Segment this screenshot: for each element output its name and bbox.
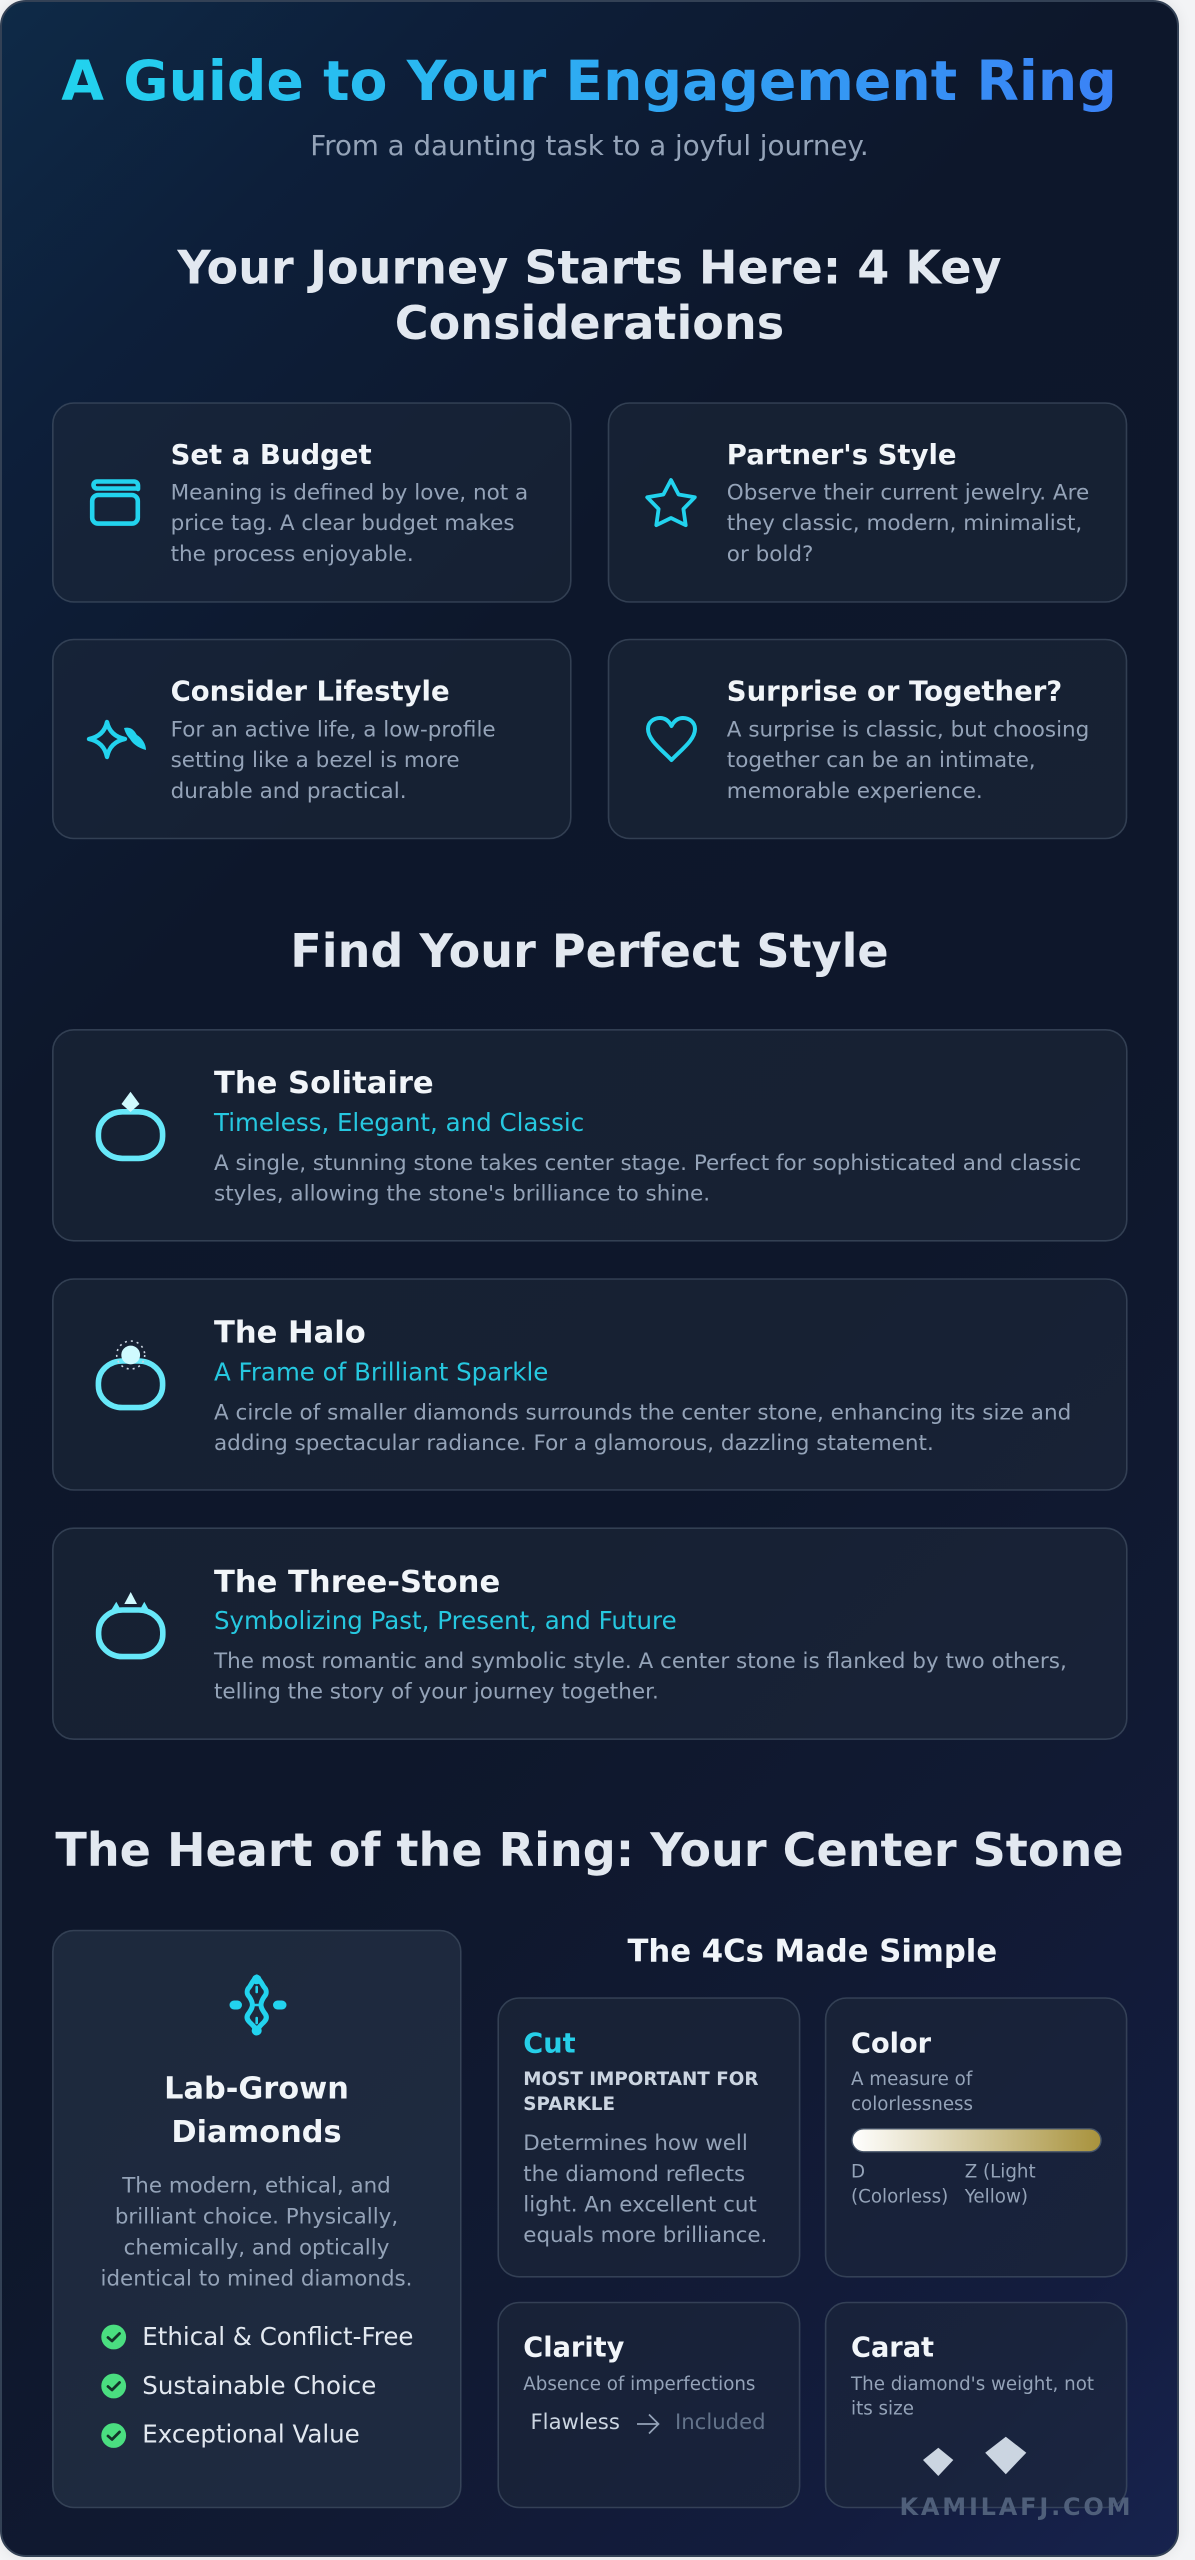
panel text: The modern, ethical, and	[121, 2174, 391, 2198]
card text: price tag. A clear budget makes	[171, 511, 515, 536]
style tagline: A Frame of Brilliant Sparkle	[214, 1357, 548, 1386]
card text: they classic, modern, minimalist,	[727, 511, 1082, 536]
panel heading: Lab-Grown	[164, 2072, 349, 2107]
list item: value: Exceptional Value	[142, 2420, 360, 2449]
card text: setting like a bezel is more	[171, 748, 460, 773]
panel: the three-stone	[53, 1528, 1127, 1739]
icon: star	[647, 480, 695, 525]
panel: consider lifestyle	[53, 640, 571, 838]
card text: A surprise is classic, but choosing	[727, 718, 1089, 742]
arrow	[637, 2414, 658, 2434]
style name: The Halo	[214, 1315, 366, 1350]
colour scale label: D: D	[851, 2162, 865, 2183]
colour scale bar	[852, 2129, 1101, 2152]
panel text: brilliant choice. Physically,	[115, 2204, 398, 2230]
icon: halo ring	[98, 1341, 163, 1408]
cut text: Determines how well	[523, 2131, 748, 2156]
panel: the halo	[53, 1279, 1127, 1490]
card heading: Surprise or Together?	[727, 676, 1062, 708]
cut text: the diamond reflects	[523, 2162, 745, 2187]
panel: surprise or together	[608, 640, 1126, 838]
cut heading: Cut	[523, 2029, 576, 2060]
watermark: KAMILAFJ.COM	[900, 2493, 1133, 2521]
list item: ethical: Ethical & Conflict-Free	[142, 2322, 413, 2351]
color text: colorlessness	[851, 2094, 973, 2115]
icon: three-stone ring	[99, 1592, 163, 1657]
card heading: Set a Budget	[171, 439, 372, 471]
panel: carat	[826, 2302, 1127, 2508]
panel text: identical to mined diamonds.	[101, 2266, 412, 2292]
colour scale label: Z: Z (Light	[965, 2162, 1036, 2183]
carat text: The diamond's weight, not	[850, 2374, 1094, 2395]
heading: find your perfect style: Find Your Perfect Style	[290, 924, 889, 978]
color heading: Color	[851, 2029, 932, 2060]
panel heading: Diamonds	[171, 2115, 342, 2150]
panel: partner's style	[608, 403, 1126, 602]
card text: the process enjoyable.	[171, 542, 414, 567]
style description: telling the story of your journey together.	[214, 1680, 659, 1705]
title: A Guide to Your Engagement Ring	[61, 50, 1117, 114]
clarity text: Absence of imperfections	[523, 2374, 755, 2395]
cut text: light. An excellent cut	[523, 2193, 757, 2218]
cut text: equals more brilliance.	[523, 2223, 767, 2248]
panel: clarity	[498, 2302, 800, 2508]
heading: the 4cs: The 4Cs Made Simple	[627, 1935, 997, 1970]
style description: The most romantic and symbolic style. A center stone is flanked by two others,	[213, 1649, 1067, 1674]
style tagline: Symbolizing Past, Present, and Future	[214, 1606, 677, 1635]
card text: Meaning is defined by love, not a	[171, 480, 528, 506]
style description: styles, allowing the stone's brilliance to shine.	[214, 1182, 710, 1207]
icon: small diamond	[923, 2448, 953, 2476]
color text: A measure of	[851, 2069, 973, 2090]
icon: diamond molecule	[230, 1975, 286, 2036]
panel text: chemically, and optically	[124, 2236, 390, 2260]
card text: together can be an intimate,	[727, 748, 1036, 773]
panel: cut	[498, 1998, 800, 2277]
panel: set a budget	[53, 403, 571, 602]
icon: sparkle	[89, 722, 146, 757]
card text: Observe their current jewelry. Are	[727, 480, 1089, 506]
heading: center stone: The Heart of the Ring: Your Center Stone	[55, 1823, 1124, 1877]
colour scale label: Z: Yellow)	[964, 2187, 1028, 2208]
card heading: Consider Lifestyle	[171, 676, 450, 708]
cut label: MOST IMPORTANT FOR	[523, 2069, 758, 2090]
panel: color	[826, 1998, 1127, 2277]
style name: The Solitaire	[214, 1066, 434, 1101]
style description: A single, stunning stone takes center stage. Perfect for sophisticated and classic	[214, 1151, 1081, 1176]
icon: large diamond	[985, 2437, 1026, 2474]
clarity heading: Clarity	[523, 2333, 625, 2364]
card heading: Partner's Style	[727, 439, 957, 471]
colour scale label: D: (Colorless)	[851, 2187, 948, 2208]
carat text: its size	[851, 2398, 914, 2420]
cut label: SPARKLE	[523, 2094, 615, 2115]
subtitle: From a daunting task to a joyful journey.	[310, 129, 869, 162]
carat heading: Carat	[851, 2333, 934, 2364]
scale: flawless: Flawless	[530, 2409, 620, 2434]
style tagline: Timeless, Elegant, and Classic	[213, 1108, 584, 1137]
scale: included: Included	[675, 2409, 766, 2434]
heading: key considerations: Your Journey Starts Here: 4 Key	[176, 240, 1002, 294]
icon: heart	[648, 718, 695, 760]
card text: memorable experience.	[727, 779, 983, 804]
style name: The Three-Stone	[214, 1565, 500, 1600]
panel: the solitaire	[53, 1030, 1127, 1241]
icon: wallet	[92, 482, 138, 524]
card text: For an active life, a low-profile	[171, 718, 496, 742]
list item: sustainable: Sustainable Choice	[142, 2371, 376, 2400]
style description: adding spectacular radiance. For a glamorous, dazzling statement.	[214, 1431, 934, 1456]
card text: or bold?	[727, 542, 813, 567]
panel: lab-grown diamonds	[53, 1930, 461, 2508]
icon: solitaire ring	[98, 1092, 163, 1158]
style description: A circle of smaller diamonds surrounds the center stone, enhancing its size and	[214, 1400, 1071, 1425]
heading: key considerations: Considerations	[395, 296, 784, 350]
card text: durable and practical.	[171, 779, 407, 804]
